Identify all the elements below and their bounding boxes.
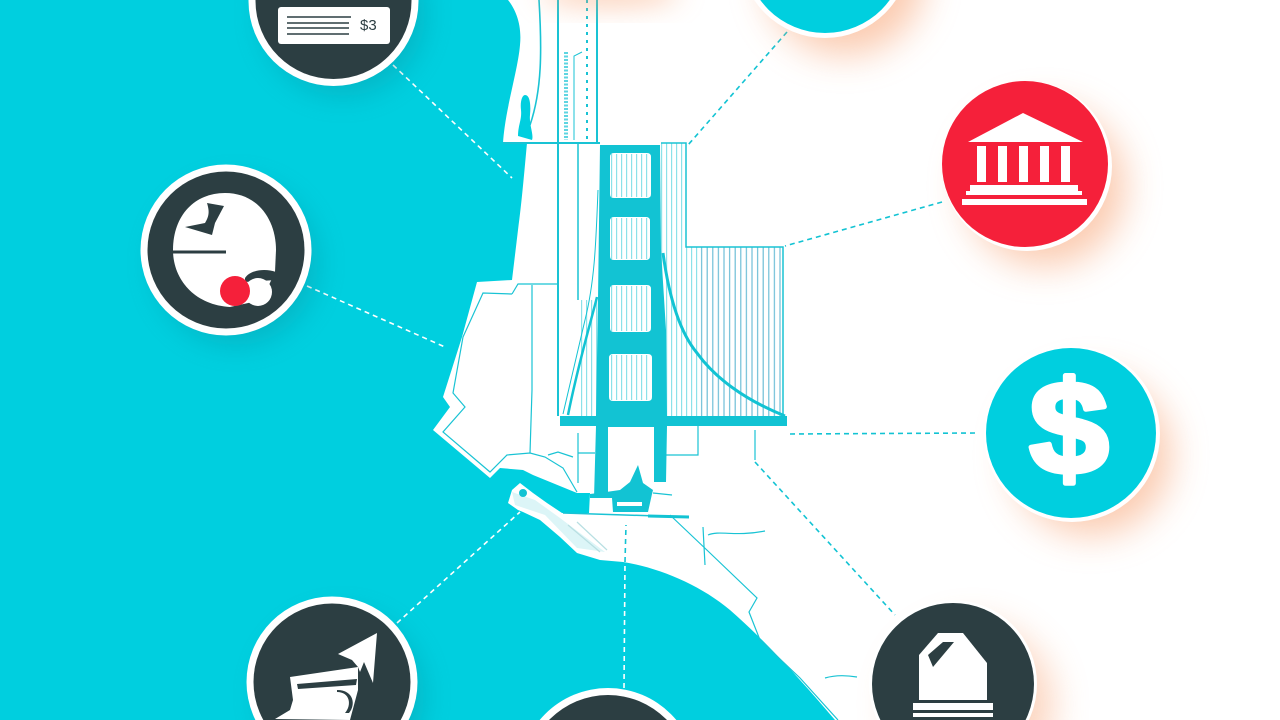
- node: clock: [140, 164, 318, 345]
- node: top teal circle: [740, 0, 925, 55]
- node: teal dollar: [984, 346, 1171, 535]
- node: bottom right fuel jug: [869, 600, 1053, 720]
- connector dashes: [307, 32, 975, 688]
- node: document card: [248, 0, 425, 96]
- hatching: bridge suspenders: [578, 143, 783, 416]
- node: red bank: [942, 81, 1125, 266]
- vertical road lines: north approach: [503, 0, 600, 416]
- node: document card: $3: [360, 17, 377, 34]
- water: teal bay and ocean: [0, 0, 835, 720]
- bridge base pier: [563, 465, 689, 517]
- bridge main cables: [563, 190, 785, 416]
- bridge tower: [560, 145, 787, 498]
- orange glow: top edge: [540, 0, 680, 6]
- map outlines: coast and streets: [443, 0, 857, 720]
- pond: small lagoon: [518, 95, 532, 140]
- node: arrow over card: [246, 596, 424, 720]
- bridge window hatching: [610, 154, 651, 400]
- island: tinted headland: [512, 489, 607, 552]
- node: teal dollar: $: [1029, 355, 1109, 502]
- node: bottom centre: [519, 688, 697, 720]
